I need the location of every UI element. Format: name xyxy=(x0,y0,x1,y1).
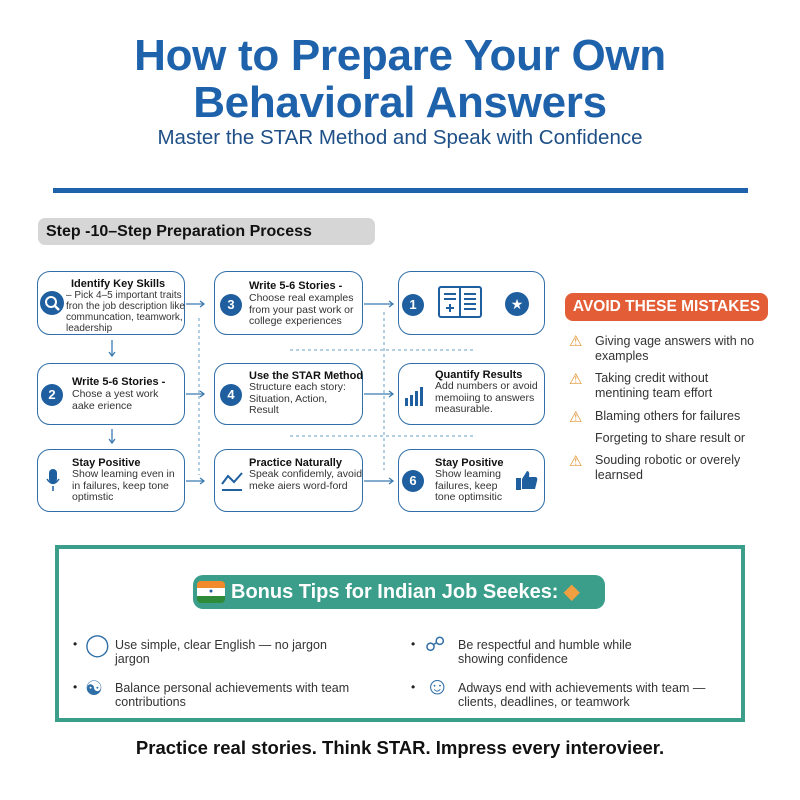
icon: star xyxy=(505,292,529,316)
title xyxy=(134,31,666,127)
tip: respectful: Be respectful and humble while showing confidence xyxy=(458,638,632,666)
icon: india flag: ● xyxy=(209,588,213,595)
avoid mistakes panel xyxy=(565,293,768,470)
tip: always end: • xyxy=(411,680,415,694)
step box: quantify: Add numbers or avoid memoiing to answers measurable. xyxy=(435,380,538,415)
icon: thumbs up xyxy=(516,471,538,490)
tip: balance achievements: Balance personal achievements with team contributions xyxy=(115,681,349,709)
mistake warning icons: ⚠ xyxy=(569,409,582,426)
mistake warning icons: ⚠ xyxy=(569,371,582,388)
tip: respectful xyxy=(411,634,632,666)
section heading pill: Step -10–Step Preparation Process xyxy=(46,223,312,240)
text: Giving vage answers with no examples xyxy=(595,334,754,363)
icon: star: ★ xyxy=(511,296,523,312)
tip: simple english: • xyxy=(73,637,77,651)
step box: write stories 2: Chose a yest work aake erience xyxy=(72,388,158,412)
step box: 1 book star: 1 xyxy=(409,297,417,312)
step box: practice naturally: Practice Naturally xyxy=(249,457,342,469)
icon: chart line xyxy=(221,472,243,491)
step box: stay positive: Stay Positive xyxy=(72,457,140,469)
step box: practice naturally: Speak confidemly, avoid meke aiers word-ford xyxy=(249,468,362,492)
step box: write stories 3: Choose real examples from your past work or college experiences xyxy=(249,292,353,327)
bonus tips panel xyxy=(55,545,745,722)
step box: write stories 2: 2 xyxy=(48,387,56,402)
step box: write stories 3 xyxy=(214,271,363,335)
icon: bar chart xyxy=(405,387,423,406)
icon: india flag xyxy=(197,581,225,603)
bonus heading pill: Bonus Tips for Indian Job Seekes: ◆ xyxy=(231,581,579,603)
mistake warning icons: ⚠ xyxy=(569,453,582,470)
mistakes heading xyxy=(565,293,768,321)
tip: respectful: • xyxy=(411,637,415,651)
step box: stay positive 6 xyxy=(398,449,545,512)
step box: stay positive 6: 6 xyxy=(409,473,417,488)
step box: STAR method xyxy=(214,363,363,425)
text: Forgeting to share result or xyxy=(595,431,745,445)
bonus heading pill xyxy=(193,575,605,609)
tip: simple english: ◯ xyxy=(85,632,110,657)
tip: simple english xyxy=(73,632,327,666)
step box: write stories 2 xyxy=(37,363,185,425)
step box: write stories 2: Write 5-6 Stories - xyxy=(72,376,165,388)
step box: quantify xyxy=(398,363,545,425)
text: Taking credit without mentining team effort xyxy=(595,371,712,400)
step box: STAR method: Use the STAR Method xyxy=(249,370,363,382)
step box: identify key skills xyxy=(37,271,185,335)
subtitle: Master the STAR Method and Speak with Confidence xyxy=(157,126,643,149)
title: Behavioral Answers xyxy=(193,78,607,127)
tip: balance achievements: • xyxy=(73,680,77,694)
mistakes heading: AVOID THESE MISTAKES xyxy=(573,298,760,315)
step box: quantify: Quantify Results xyxy=(435,369,522,381)
icon: search xyxy=(40,291,64,315)
step box: identify key skills: – Pick 4–5 important traits fron the job description like communcation, teamwork, leadership xyxy=(66,290,185,334)
tip: balance achievements: ☯ xyxy=(85,678,103,700)
mistake warning icons xyxy=(569,333,582,470)
icon: book xyxy=(438,286,482,318)
step box: 1 book star xyxy=(398,271,545,335)
text: Souding robotic or overely learnsed xyxy=(595,453,740,482)
tip: respectful: ☍ xyxy=(425,634,445,656)
step box: stay positive 6: Show leaming failures, keep tone optimsitic xyxy=(435,468,502,503)
tip: always end: Adways end with achievements with team — clients, deadlines, or teamwork xyxy=(458,681,705,709)
step box: write stories 3: 3 xyxy=(227,297,235,312)
section heading pill xyxy=(38,218,375,245)
footer tagline: Practice real stories. Think STAR. Impress every interovieer. xyxy=(136,737,664,758)
step box: stay positive 6: Stay Positive xyxy=(435,457,503,469)
mistake warning icons: ⚠ xyxy=(569,333,582,350)
step box: stay positive: Show leaming even in in failures, keep tone optimstic xyxy=(72,468,175,503)
divider rule xyxy=(53,188,748,193)
tip: simple english: Use simple, clear English — no jargon jargon xyxy=(115,638,327,666)
step box: identify key skills: Identify Key Skills xyxy=(71,278,165,290)
step box: STAR method: Structure each story: Situation, Action, Result xyxy=(249,381,346,416)
text: Blaming others for failures xyxy=(595,409,740,423)
tip: always end: ☺ xyxy=(425,673,450,700)
title: How to Prepare Your Own xyxy=(134,31,666,80)
step box: practice naturally xyxy=(214,449,363,512)
icon: microphone xyxy=(46,469,60,491)
tip: always end xyxy=(411,673,706,709)
step box: STAR method: 4 xyxy=(227,387,235,402)
step box: write stories 3: Write 5-6 Stories - xyxy=(249,280,342,292)
step box: stay positive xyxy=(37,449,185,512)
